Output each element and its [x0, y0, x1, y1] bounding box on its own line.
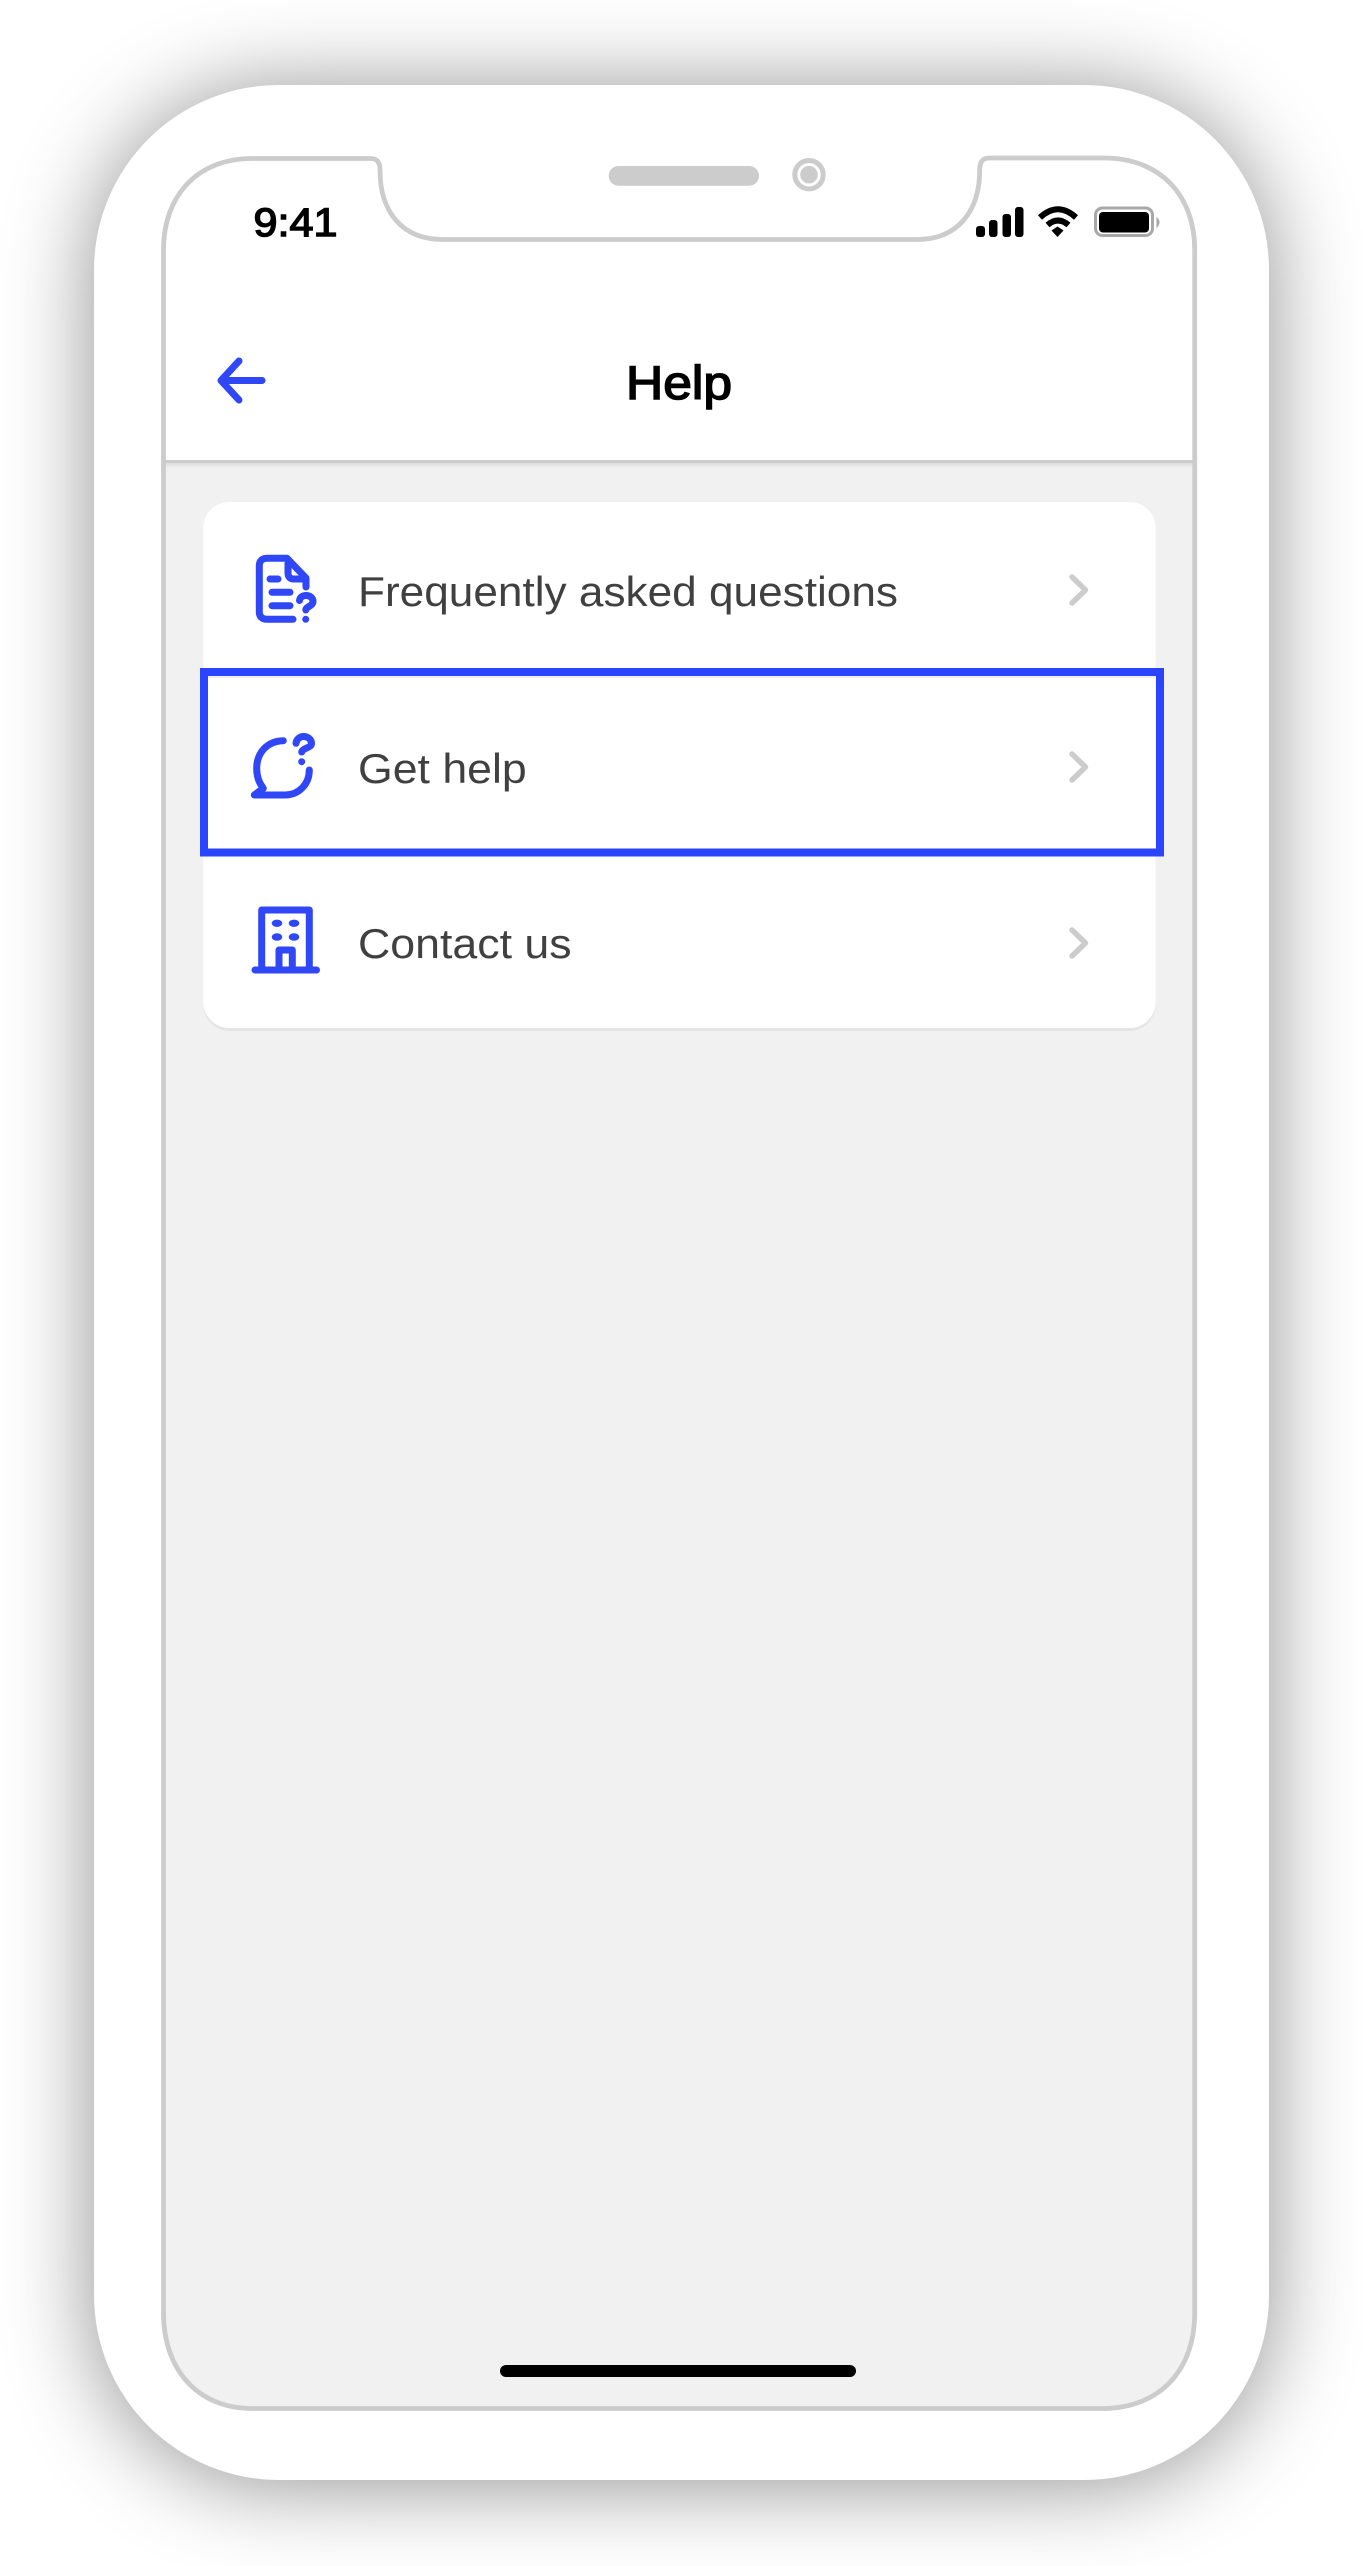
label: Frequently asked questions: [358, 568, 898, 615]
heading: Help: Help: [626, 356, 732, 409]
icon: speech bubble with question mark: [254, 736, 312, 795]
menu row: Frequently asked questions: [259, 558, 1086, 623]
icon: wifi: [1040, 209, 1076, 237]
chevron: [1072, 754, 1086, 780]
icon: back arrow: [221, 361, 262, 400]
phone screen: [160, 158, 1200, 2413]
chevron: [1072, 930, 1086, 956]
icon: document with question mark: [259, 558, 313, 623]
home indicator: [500, 2365, 856, 2377]
icon: battery: [1096, 208, 1159, 236]
phone illustration: [161, 156, 1198, 2411]
camera: [795, 160, 823, 189]
highlight box around Get help: [204, 672, 1160, 852]
icon: office building: [255, 910, 316, 970]
icon: signal bars: [976, 207, 1024, 237]
menu row: Get help: [254, 736, 1086, 795]
speaker: [609, 166, 759, 186]
label: Contact us: [358, 920, 572, 967]
chevron: [1072, 577, 1086, 603]
status bar time: 9:41: [254, 201, 338, 245]
panel: help menu card: [203, 502, 1156, 1031]
menu row: Contact us: [255, 910, 1086, 970]
label: Get help: [358, 745, 527, 792]
